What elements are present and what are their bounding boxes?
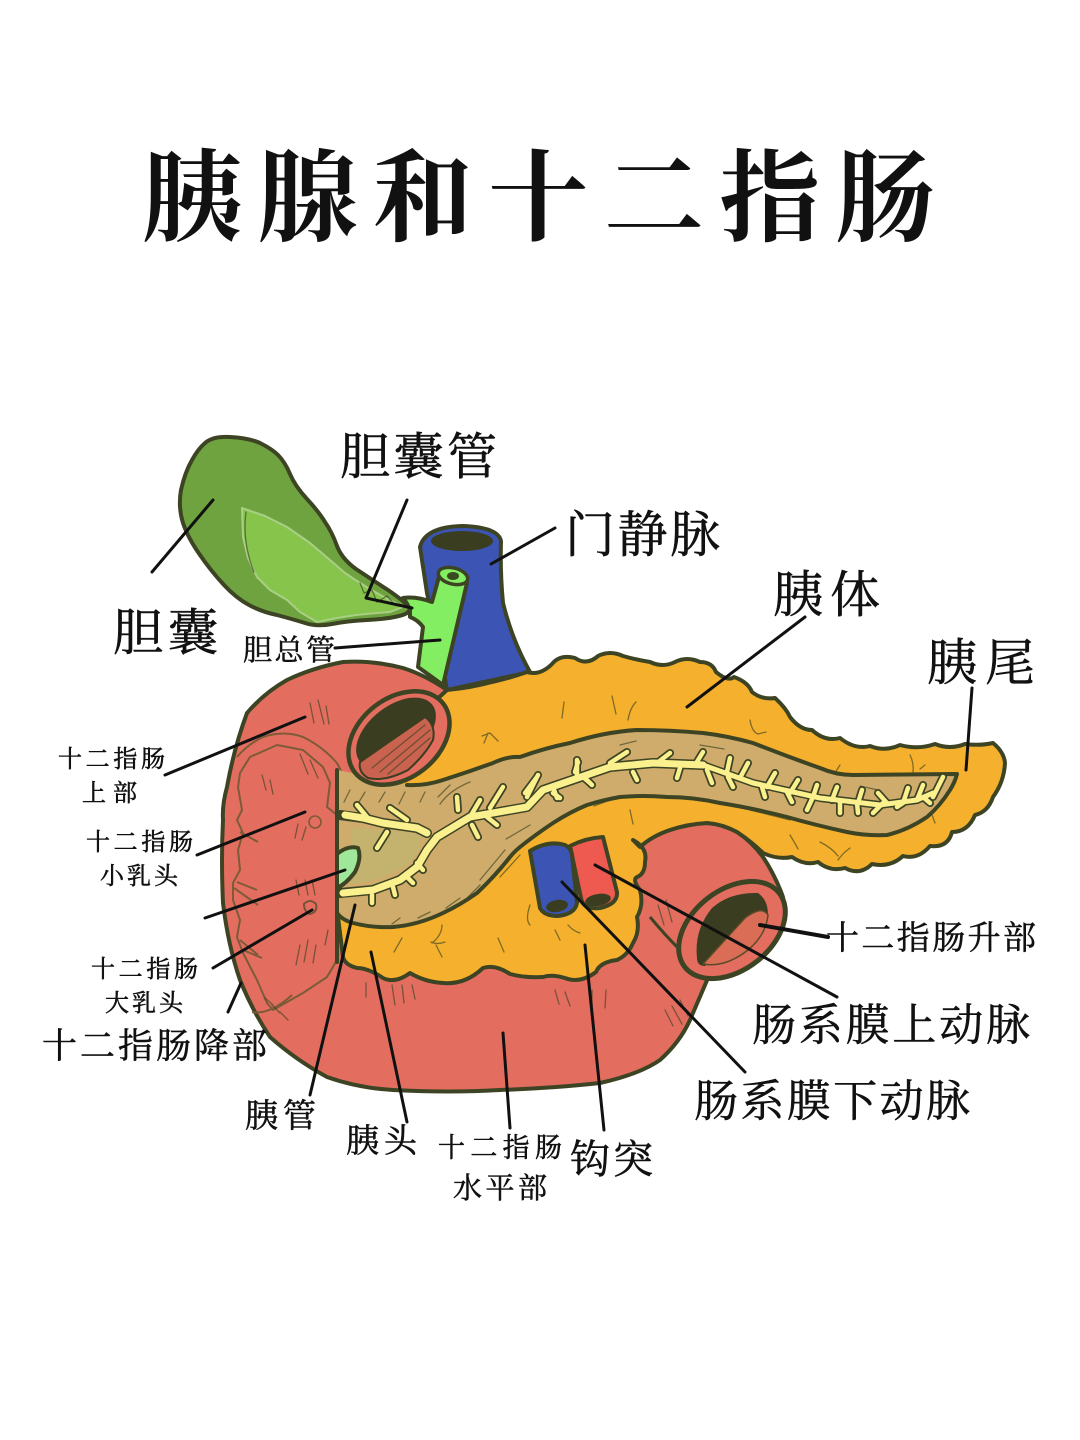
- label: 十二指肠大乳头: 大乳头: [105, 990, 184, 1017]
- leader line: duodenum ascending: [760, 925, 828, 937]
- label: 胰头: 胰头: [346, 1123, 418, 1160]
- label: 十二指肠小乳头: 小乳头: [100, 863, 179, 890]
- pancreatic parenchyma with ducts: [337, 730, 957, 962]
- label: 胆囊管: 胆囊管: [340, 429, 497, 485]
- leader line: portal vein: [491, 528, 555, 564]
- minor papilla: [309, 816, 321, 828]
- major papilla: [337, 847, 359, 888]
- label: 十二指肠小乳头: 十二指肠: [86, 829, 193, 856]
- leader line: superior mesenteric: [595, 865, 837, 997]
- leader line: cystic duct: [366, 500, 412, 608]
- duodenum ascending cross-section: [660, 862, 804, 998]
- title: 胰腺和十二指肠: [142, 144, 935, 255]
- anatomy illustration: [180, 437, 1005, 1092]
- leader line: pancreatic duct: [310, 905, 355, 1095]
- label: 胆囊: 胆囊: [113, 605, 218, 661]
- leader line: gallbladder: [152, 500, 213, 572]
- superior mesenteric artery (red): [570, 837, 617, 908]
- duodenum upper cross-section: [330, 672, 468, 804]
- label: 胰管: 胰管: [245, 1098, 316, 1135]
- label: 十二指肠大乳头: [91, 956, 198, 1017]
- common bile duct: [403, 565, 469, 685]
- portal vein: [420, 526, 530, 690]
- leader line: pancreas tail: [966, 688, 972, 770]
- label: 十二指肠水平部: 十二指肠: [438, 1133, 562, 1163]
- label: 十二指肠上部: [58, 746, 165, 807]
- label: 胰尾: 胰尾: [927, 635, 1035, 691]
- leader line: pancreas head: [371, 952, 407, 1122]
- label: 十二指肠升部: 十二指肠升部: [826, 920, 1036, 957]
- inferior mesenteric vessel (blue): [530, 843, 577, 916]
- duodenum: [222, 662, 783, 1092]
- gallbladder: [180, 437, 410, 625]
- leader line: uncinate process: [585, 945, 604, 1130]
- pancreatic duct branches (outline): [357, 752, 943, 903]
- label: 钩突: 钩突: [570, 1137, 653, 1182]
- leader line: duodenum horizontal: [503, 1033, 510, 1128]
- leader line: common bile duct: [335, 640, 440, 648]
- leader line: major papilla opening: [205, 870, 345, 918]
- label: 十二指肠上部: 十二指肠: [58, 746, 165, 773]
- label: 胰体: 胰体: [773, 567, 880, 623]
- gallbladder inner wall: [242, 508, 403, 622]
- label: 胆总管: 胆总管: [243, 634, 335, 667]
- leader line: pancreas body: [687, 617, 805, 707]
- label: 肠系膜下动脉: 肠系膜下动脉: [694, 1077, 970, 1126]
- leader line: duodenum superior: [165, 717, 305, 775]
- leader line: minor papilla: [197, 812, 305, 855]
- label: 十二指肠上部: 上部: [82, 780, 137, 807]
- descending part inner folds: [233, 745, 337, 1010]
- leader line: inferior mesenteric: [562, 882, 745, 1072]
- label: 十二指肠水平部: [438, 1133, 562, 1205]
- leader line: major papilla: [213, 910, 312, 968]
- label: 肠系膜上动脉: 肠系膜上动脉: [752, 1001, 1030, 1050]
- label: 十二指肠降部: 十二指肠降部: [42, 1027, 267, 1066]
- pancreatic duct (yellow): [357, 752, 943, 903]
- major papilla mark: [304, 901, 316, 914]
- label: 十二指肠大乳头: 十二指肠: [91, 956, 198, 983]
- label: 门静脉: 门静脉: [565, 507, 720, 563]
- leader line: duodenum descending: [228, 983, 241, 1012]
- label: 十二指肠小乳头: [86, 829, 193, 890]
- label: 十二指肠水平部: 水平部: [453, 1172, 547, 1205]
- pancreas: [338, 653, 1005, 983]
